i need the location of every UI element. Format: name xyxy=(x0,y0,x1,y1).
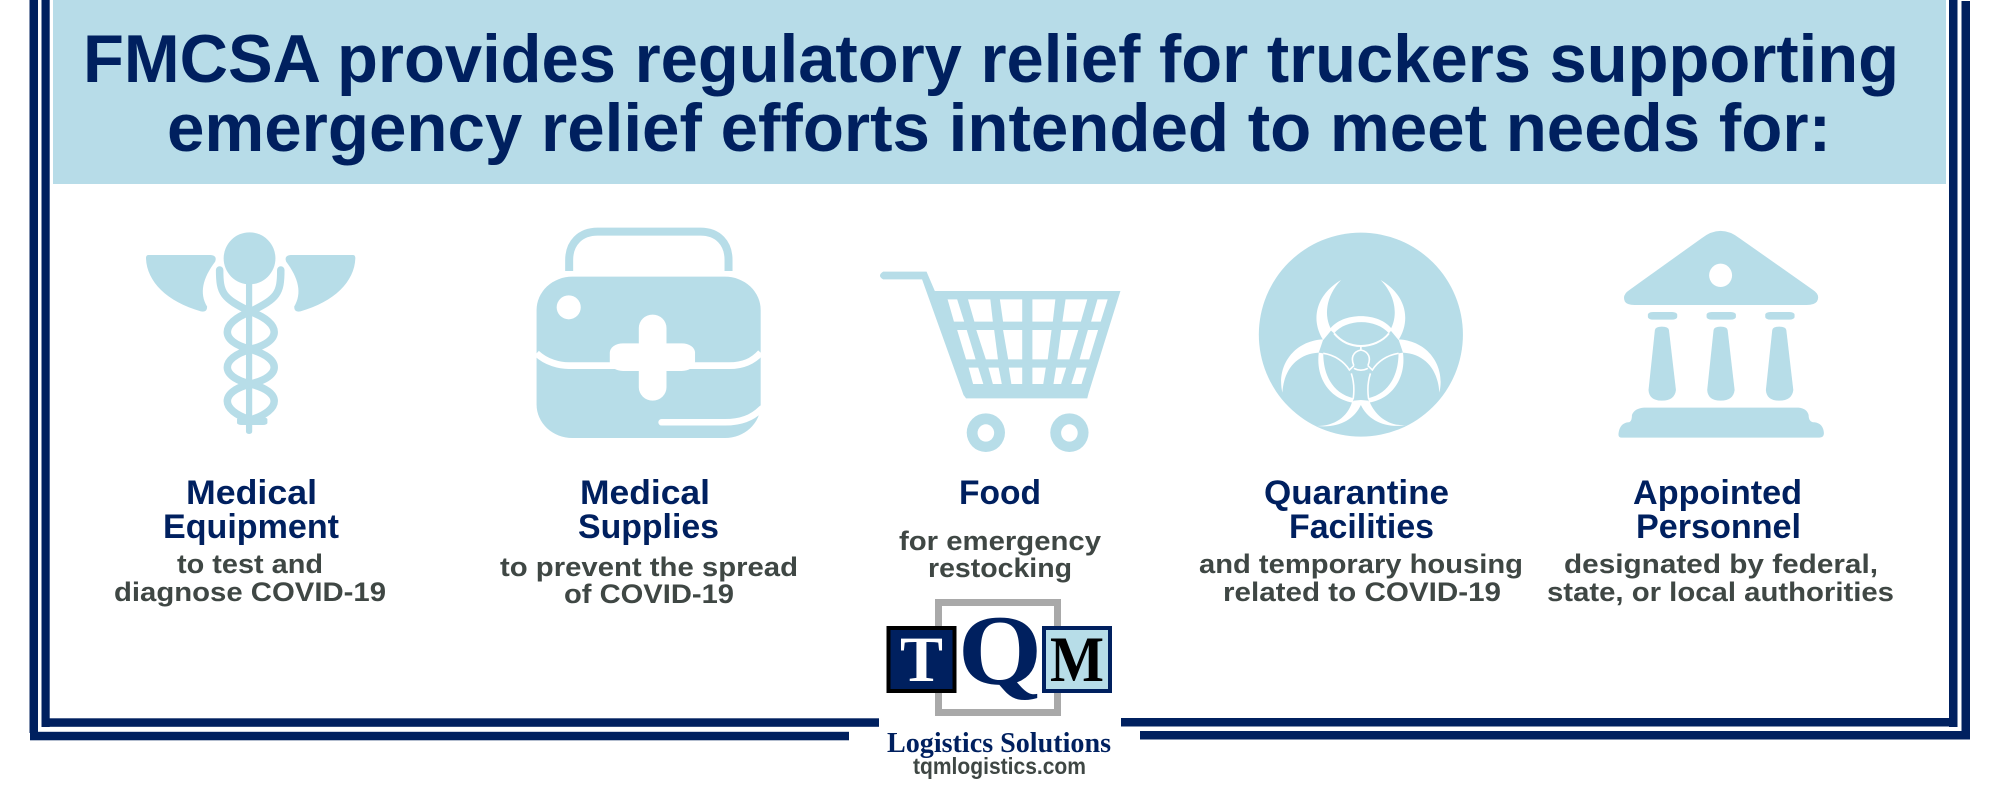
label: food: Food xyxy=(959,474,1041,512)
label: food xyxy=(899,474,1101,583)
logo: TQM Logistics Solutions xyxy=(887,595,1111,779)
logo: TQM Logistics Solutions: Q xyxy=(958,595,1042,706)
title: emergency relief efforts intended to meet needs for: xyxy=(167,90,1831,166)
label: quarantine facilities: Facilities xyxy=(1289,508,1434,546)
label: quarantine facilities: related to COVID-19 xyxy=(1223,577,1501,607)
icon: shopping cart xyxy=(880,272,1120,452)
icon: first aid kit xyxy=(537,232,762,438)
header band xyxy=(53,0,1946,184)
label: food: for emergency xyxy=(899,526,1101,556)
label: quarantine facilities: Quarantine xyxy=(1264,474,1449,512)
label: medical equipment: Medical xyxy=(186,474,317,512)
label: medical supplies: Medical xyxy=(580,474,710,512)
logo: TQM Logistics Solutions: tqmlogistics.com xyxy=(913,753,1086,779)
label: medical equipment: diagnose COVID-19 xyxy=(114,577,386,607)
label: appointed personnel: Appointed xyxy=(1633,474,1802,512)
label: appointed personnel xyxy=(1547,474,1894,607)
icon: biohazard xyxy=(1259,233,1463,437)
label: quarantine facilities xyxy=(1199,474,1523,607)
label: appointed personnel: Personnel xyxy=(1636,508,1801,546)
label: medical supplies: Supplies xyxy=(578,508,719,546)
label: appointed personnel: designated by federal, xyxy=(1564,549,1878,579)
label: medical equipment xyxy=(114,474,386,607)
label: medical equipment: Equipment xyxy=(163,508,339,546)
label: quarantine facilities: and temporary housing xyxy=(1199,549,1523,579)
logo: TQM Logistics Solutions: M xyxy=(1050,624,1104,696)
title: FMCSA provides regulatory relief for truckers supporting xyxy=(83,21,1899,97)
label: medical equipment: to test and xyxy=(177,549,323,579)
label: appointed personnel: state, or local authorities xyxy=(1547,577,1894,607)
logo: TQM Logistics Solutions: T xyxy=(900,624,943,696)
label: medical supplies: to prevent the spread xyxy=(500,552,798,582)
icon: government building xyxy=(1618,231,1824,438)
label: medical supplies: of COVID-19 xyxy=(564,579,734,609)
logo: TQM Logistics Solutions: Logistics Solutions xyxy=(887,728,1111,759)
title xyxy=(83,21,1899,166)
label: medical supplies xyxy=(500,474,798,609)
label: food: restocking xyxy=(928,553,1072,583)
icon: caduceus xyxy=(146,232,355,434)
